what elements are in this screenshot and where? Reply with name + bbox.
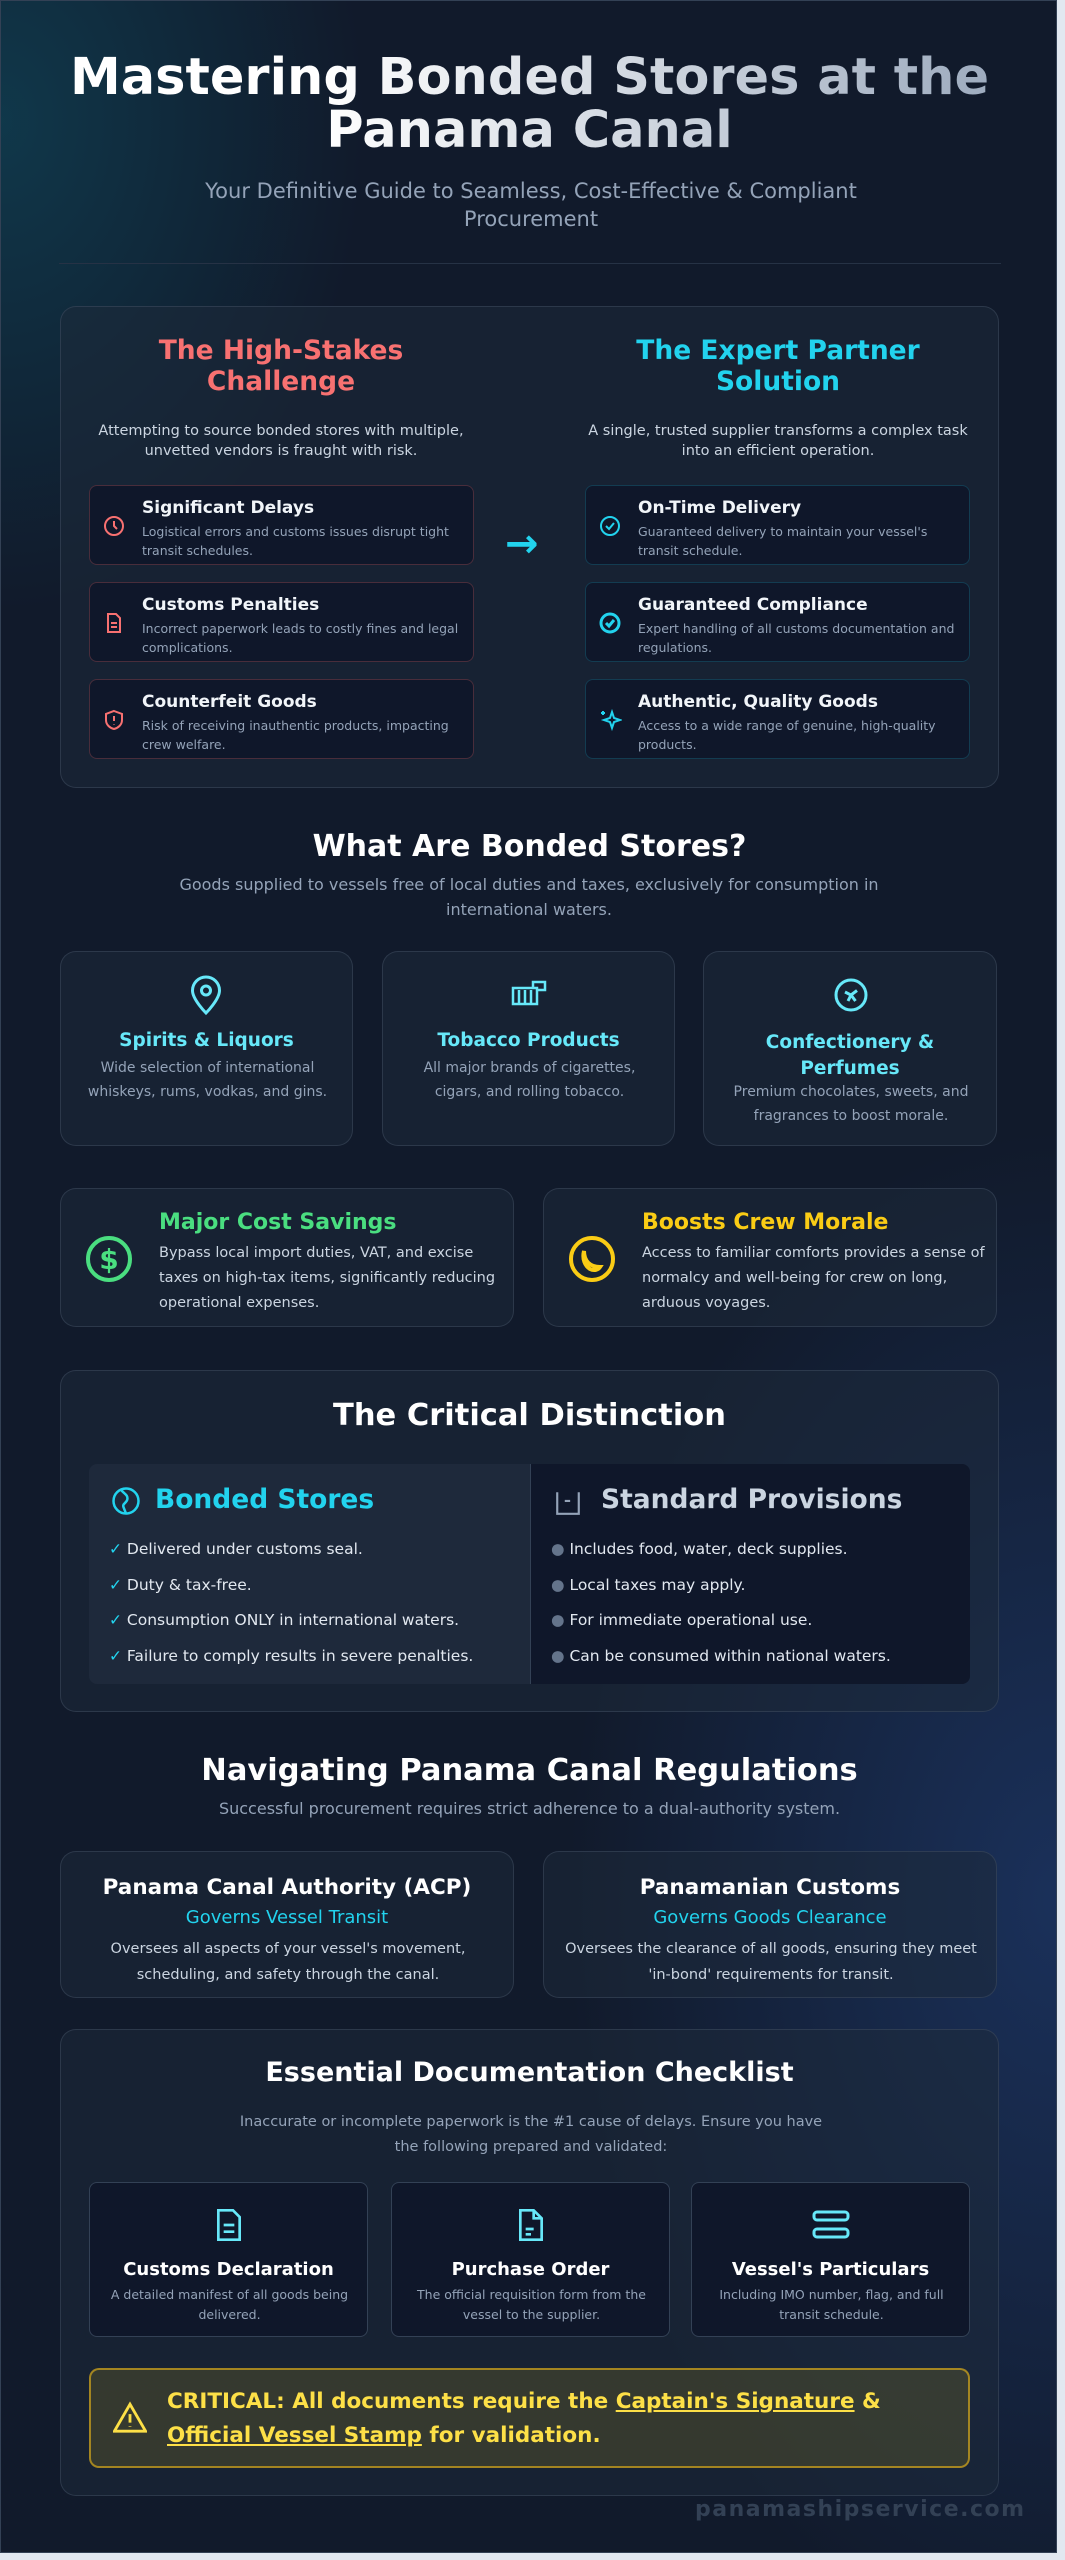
text: definition: Goods supplied to vessels free of local duties and taxes, exclusively for consumption in international waters.	[179, 875, 879, 919]
card: counterfeit: Risk of receiving inauthentic products, impacting crew welfare.	[142, 718, 449, 752]
icon: check circle	[600, 516, 620, 536]
icon: globe	[112, 1487, 140, 1515]
column: standard provisions: ● For immediate operational use.	[551, 1611, 812, 1629]
card: customs	[543, 1851, 997, 1998]
card: ACP: Governs Vessel Transit	[186, 1907, 388, 1928]
column: standard provisions: ● Can be consumed within national waters.	[551, 1646, 891, 1664]
icon: cup	[556, 1492, 580, 1515]
card: spirits: Spirits & Liquors	[119, 1030, 294, 1051]
card: delays	[89, 485, 474, 565]
icon: candy	[834, 978, 868, 1012]
card: ACP	[60, 1851, 514, 1998]
card: customs: Oversees the clearance of all goods, ensuring they meet 'in-bond' requirements for transit.	[565, 1941, 977, 1983]
card: crew morale: Access to familiar comforts provides a sense of normalcy and well-being for crew on long, arduous voyages.	[642, 1245, 985, 1311]
icon: badge check	[600, 612, 620, 634]
title: Panama Canal	[326, 101, 733, 160]
heading: The Critical Distinction	[333, 1398, 726, 1433]
table	[109, 1464, 970, 1684]
footer: website: panamashipservice.com	[695, 2497, 1026, 2522]
card: compliance: Guaranteed Compliance	[638, 595, 868, 615]
card: on-time: Guaranteed delivery to maintain your vessel's transit schedule.	[638, 524, 927, 558]
icon: document	[217, 2209, 241, 2241]
icon: pin	[191, 976, 221, 1015]
card: authentic: Access to a wide range of genuine, high-quality products.	[638, 718, 936, 752]
icon: shield	[105, 710, 123, 730]
card: counterfeit: Counterfeit Goods	[142, 692, 317, 712]
icon: fruit slice	[569, 1236, 615, 1282]
text: challenge intro: Attempting to source bonded stores with multiple, unvetted vendors is fraught with risk.	[98, 423, 464, 459]
text: intro: Inaccurate or incomplete paperwork is the #1 cause of delays. Ensure you have the following prepared and validated:	[240, 2114, 822, 2155]
callout: critical	[89, 2368, 970, 2468]
icon: dollar: $	[99, 1243, 119, 1276]
card: tobacco	[382, 951, 675, 1146]
icon: dollar	[86, 1236, 132, 1282]
card: on-time: On-Time Delivery	[638, 498, 801, 518]
card: customs declaration: A detailed manifest of all goods being delivered.	[111, 2287, 348, 2322]
heading: challenge	[158, 335, 403, 397]
card: crew morale: Boosts Crew Morale	[642, 1210, 888, 1235]
icon: sparkles	[601, 709, 622, 731]
card: customs declaration: Customs Declaration	[123, 2259, 334, 2280]
heading: regulations: Navigating Panama Canal Regulations	[201, 1753, 858, 1788]
card: delays: Logistical errors and customs issues disrupt tight transit schedules.	[142, 524, 449, 558]
title: Mastering Bonded Stores at the	[70, 48, 989, 107]
callout: critical: CRITICAL: All documents require the Captain's Signature & Official Vessel Stamp for validation.	[167, 2389, 881, 2448]
panel: critical distinction	[60, 1370, 999, 1712]
card: authentic: Authentic, Quality Goods	[638, 692, 878, 712]
icon: cigarettes	[512, 980, 546, 1006]
card: vessel particulars: Vessel's Particulars	[732, 2259, 929, 2280]
column: standard provisions: Standard Provisions	[601, 1484, 902, 1515]
column: bonded stores	[89, 1464, 530, 1684]
card: purchase order: Purchase Order	[452, 2259, 609, 2280]
icon: warning	[113, 2402, 147, 2433]
column: bonded stores: Bonded Stores	[155, 1484, 374, 1515]
column: standard provisions: ● Local taxes may apply.	[551, 1576, 745, 1594]
card: ACP: Panama Canal Authority (ACP)	[103, 1875, 471, 1900]
panel: challenge vs solution	[60, 306, 999, 788]
card: customs: Panamanian Customs	[640, 1875, 900, 1900]
card: purchase order: The official requisition form from the vessel to the supplier.	[417, 2287, 646, 2322]
panel: documentation checklist	[60, 2029, 999, 2496]
card: tobacco: Tobacco Products	[437, 1030, 620, 1051]
card: customs declaration	[89, 2182, 368, 2337]
card: cost savings: Bypass local import duties, VAT, and excise taxes on high-tax items, significantly reducing operational expenses.	[159, 1245, 495, 1311]
card: tobacco: All major brands of cigarettes, cigars, and rolling tobacco.	[424, 1060, 635, 1100]
card: spirits: Wide selection of international whiskeys, rums, vodkas, and gins.	[88, 1060, 327, 1100]
card: authentic	[585, 679, 970, 759]
column: bonded stores: ✓ Consumption ONLY in international waters.	[109, 1611, 459, 1629]
heading: what are bonded stores: What Are Bonded Stores?	[313, 829, 746, 864]
card: vessel particulars	[691, 2182, 970, 2337]
heading: challenge: The High-Stakes	[159, 335, 403, 366]
heading: solution	[636, 335, 920, 397]
card: compliance: Expert handling of all customs documentation and regulations.	[638, 621, 954, 655]
text: solution intro: A single, trusted supplier transforms a complex task into an efficient operation.	[588, 423, 968, 459]
card: delays: Significant Delays	[142, 498, 314, 518]
icon: file	[519, 2209, 543, 2241]
subtitle: Your Definitive Guide to Seamless, Cost-Effective & Compliant Procurement	[205, 179, 857, 231]
card: counterfeit	[89, 679, 474, 759]
icon: server bars	[812, 2210, 850, 2238]
card: vessel particulars: Including IMO number, flag, and full transit schedule.	[719, 2287, 944, 2322]
card: ACP: Oversees all aspects of your vessel's movement, scheduling, and safety through the canal.	[111, 1941, 465, 1983]
column: bonded stores: ✓ Delivered under customs seal.	[109, 1540, 363, 1558]
column: bonded stores: ✓ Duty & tax-free.	[109, 1576, 252, 1594]
icon: document	[107, 613, 121, 633]
card: spirits	[60, 951, 353, 1146]
card: confectionery	[703, 951, 997, 1146]
card: penalties: Customs Penalties	[142, 595, 319, 615]
text: regulations intro: Successful procurement requires strict adherence to a dual-authority system.	[219, 1799, 840, 1818]
card: customs: Governs Goods Clearance	[653, 1907, 887, 1928]
card: purchase order	[391, 2182, 670, 2337]
card: cost savings: Major Cost Savings	[159, 1210, 397, 1235]
card: penalties	[89, 582, 474, 662]
card: confectionery: Perfumes	[800, 1058, 900, 1079]
card: confectionery: Confectionery &	[766, 1032, 934, 1053]
heading: challenge: Challenge	[207, 366, 355, 397]
column: bonded stores: ✓ Failure to comply results in severe penalties.	[109, 1646, 473, 1664]
title	[1, 51, 1058, 157]
arrow: →	[505, 521, 539, 567]
column: standard provisions: ● Includes food, water, deck supplies.	[551, 1540, 848, 1558]
card: compliance	[585, 582, 970, 662]
card: penalties: Incorrect paperwork leads to costly fines and legal complications.	[142, 621, 458, 655]
card: on-time	[585, 485, 970, 565]
heading: Essential Documentation Checklist	[265, 2057, 794, 2088]
heading: solution: Solution	[716, 366, 840, 397]
column: standard provisions	[530, 1464, 970, 1684]
card: confectionery: Premium chocolates, sweets, and fragrances to boost morale.	[734, 1084, 968, 1124]
icon: clock	[104, 516, 124, 536]
card: cost savings	[60, 1188, 514, 1327]
heading: solution: The Expert Partner	[636, 335, 920, 366]
card: crew morale	[543, 1188, 997, 1327]
